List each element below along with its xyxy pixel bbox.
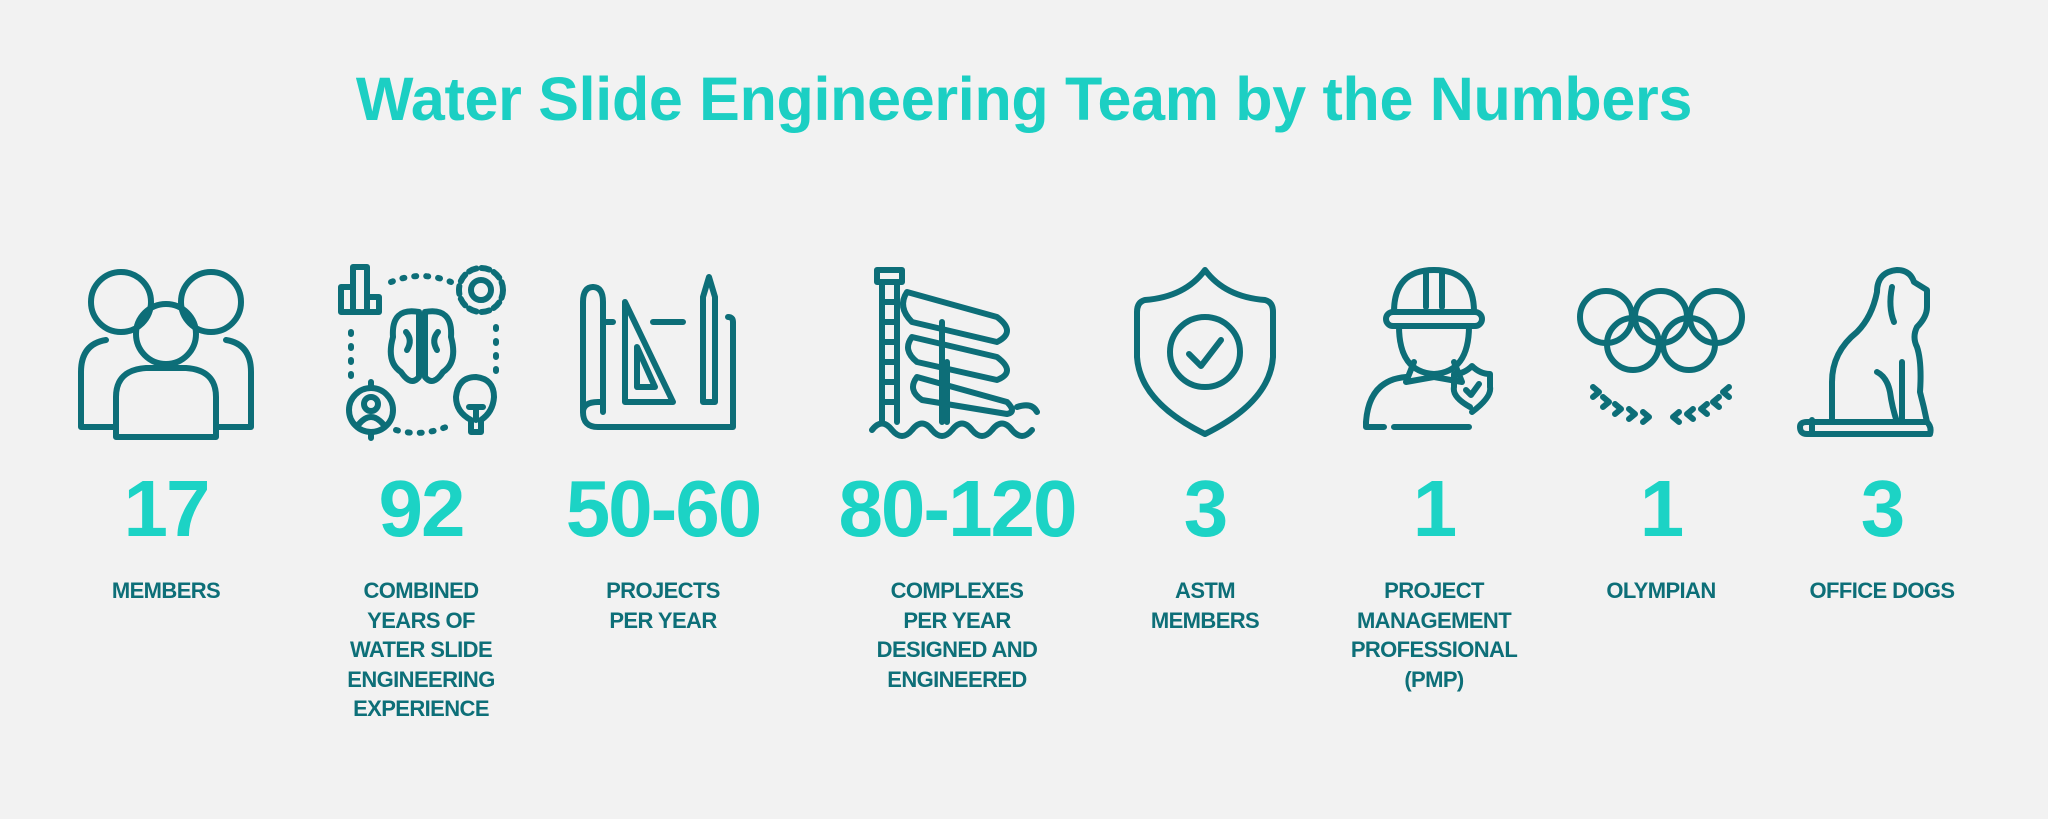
number: 3 [1861,464,1903,553]
panel: dogs [1797,267,1954,603]
label: ENGINEERING [347,666,495,692]
label: ASTM [1175,578,1235,603]
panel: astm [1134,267,1276,632]
number: 3 [1184,464,1226,553]
label: PROJECTS [606,578,720,603]
panel: members [78,269,254,603]
label: OFFICE DOGS [1810,578,1954,603]
label [1351,578,1518,692]
panel: complexes [838,267,1076,692]
number: 1 [1413,464,1455,553]
label: PROFESSIONAL [1351,637,1517,662]
label [347,578,495,721]
label: MEMBERS [112,578,220,603]
label: OLYMPIAN [1606,578,1716,603]
number: 50-60 [566,464,760,553]
icon: sitting dog [1797,267,1934,437]
icon: engineer [1363,267,1494,430]
icon: olympic rings [1577,288,1745,425]
title: Water Slide Engineering Team by the Numbers [356,65,1692,133]
panel: pmp [1351,267,1518,692]
label: EXPERIENCE [353,696,489,721]
icon: brain network [338,264,506,441]
icon: blueprint [580,274,736,430]
number: 80-120 [838,464,1076,553]
panel: projects [566,274,760,632]
panel: olympian [1577,288,1745,603]
label [606,578,720,632]
label: PROJECT [1384,578,1484,603]
label: MANAGEMENT [1357,608,1511,632]
label [1151,578,1259,632]
label [877,578,1037,692]
number: 1 [1640,464,1682,553]
icon: shield check [1134,267,1276,437]
label: YEARS OF [367,608,475,632]
number: 92 [378,464,463,553]
icon: water slide [869,267,1040,439]
panel: experience [338,264,506,721]
label: (PMP) [1404,666,1464,692]
label: ENGINEERED [887,666,1027,692]
label: MEMBERS [1151,608,1259,632]
icon: people [78,269,254,440]
label: COMBINED [364,578,478,603]
label: DESIGNED AND [877,637,1037,662]
label: WATER SLIDE [350,637,492,662]
label: PER YEAR [609,608,717,632]
label: COMPLEXES [891,578,1023,603]
label: PER YEAR [903,608,1011,632]
number: 17 [124,464,208,553]
